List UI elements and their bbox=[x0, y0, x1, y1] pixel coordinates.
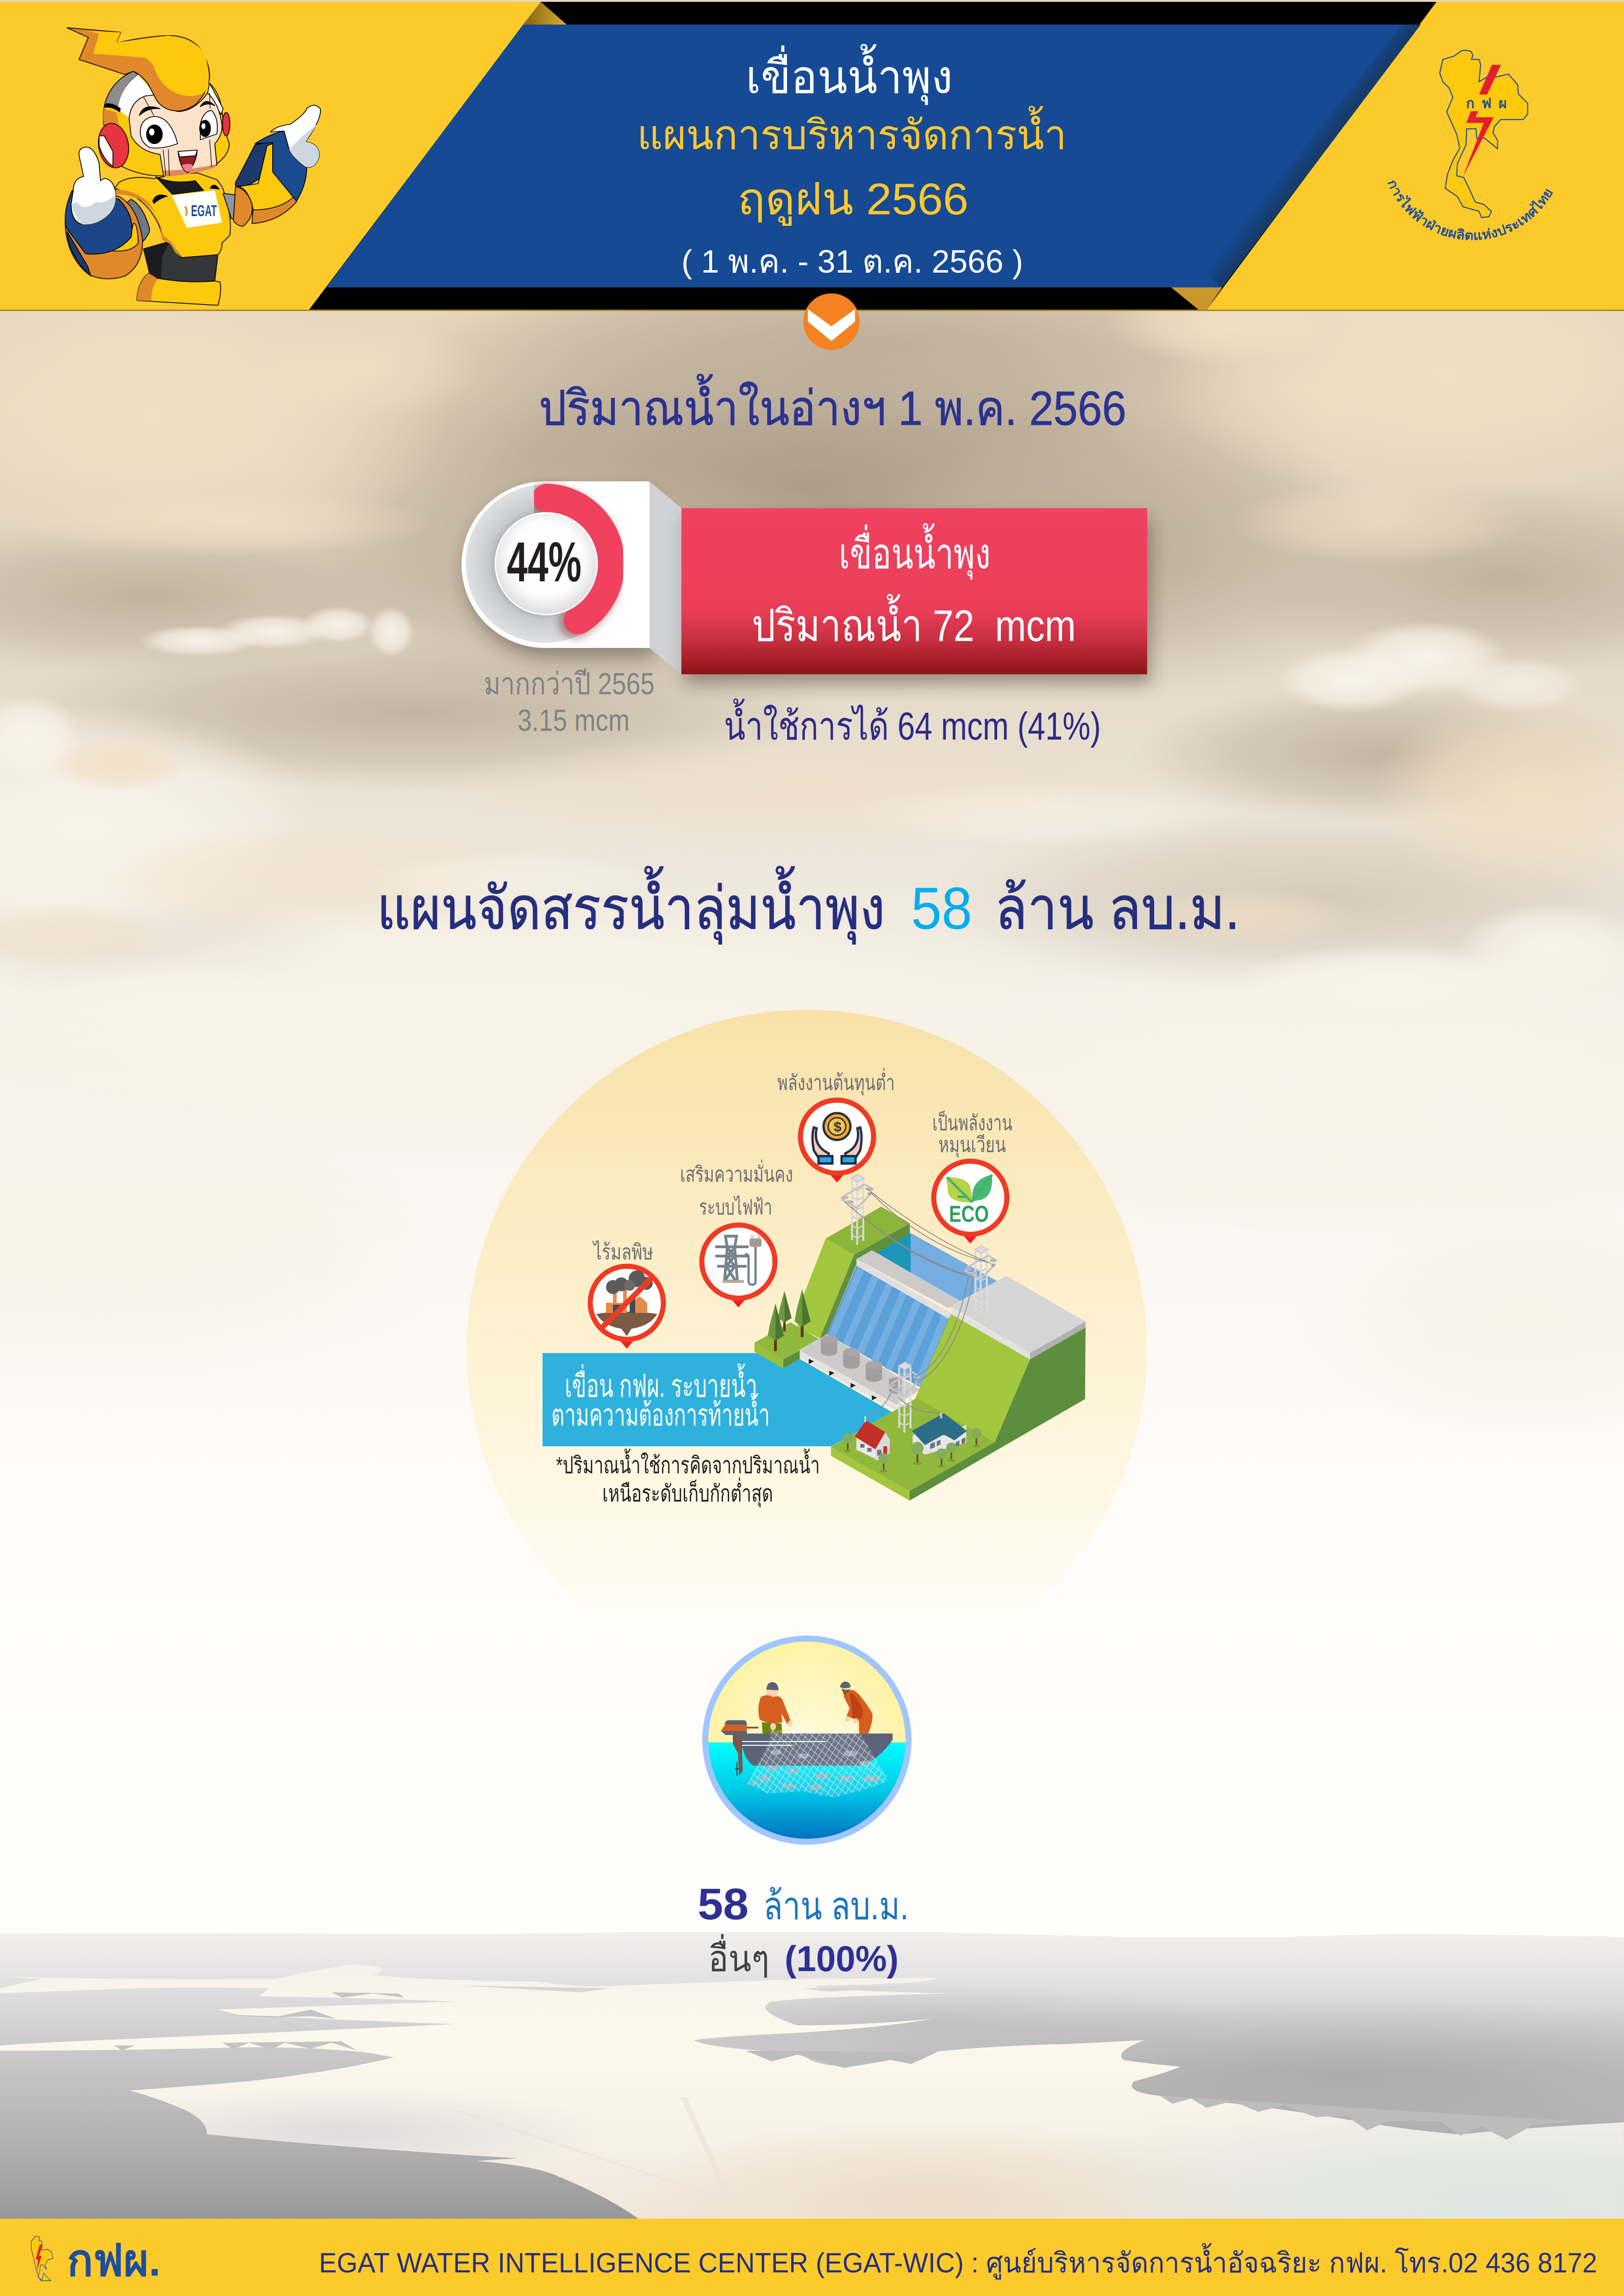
comparison note: 3.15 mcm bbox=[518, 703, 630, 737]
dam illustration bbox=[543, 1175, 1086, 1500]
release label text: ตามความต้องการท้ายน้ำ bbox=[551, 1393, 770, 1432]
header black backing bbox=[278, 2, 1481, 310]
benefit: grid stability bbox=[680, 1159, 793, 1307]
header title: เขื่อนน้ำพุง bbox=[746, 44, 953, 106]
village trees bbox=[843, 1428, 981, 1473]
far hills and land bbox=[0, 1932, 1624, 2221]
footer logo text: กฟผ. bbox=[67, 2236, 161, 2285]
section heading: allocation plan: ล้าน ลบ.ม. bbox=[995, 876, 1240, 942]
mascot face bbox=[129, 93, 222, 177]
gauge value: 44% bbox=[507, 530, 581, 593]
left hill bbox=[797, 1207, 910, 1338]
benefit: renewable: เป็นพลังงาน bbox=[932, 1110, 1012, 1135]
pin: money hands bbox=[800, 1100, 874, 1182]
power lines bbox=[844, 1188, 991, 1417]
mascot bbox=[65, 28, 320, 305]
section heading: allocation plan bbox=[377, 866, 1240, 945]
allocation use: อื่นๆ bbox=[708, 1934, 769, 1979]
pine trees bbox=[768, 1289, 811, 1351]
logo initials: กฟผ bbox=[1466, 95, 1507, 111]
islets and shore reflections bbox=[461, 1985, 937, 1992]
transmission towers bbox=[841, 1175, 997, 1432]
pin: money hands: $ bbox=[834, 1120, 842, 1135]
mascot hair bolt bbox=[67, 28, 210, 111]
boat hull bbox=[742, 1734, 893, 1766]
gauge panel bbox=[462, 481, 681, 674]
mascot ear bbox=[95, 112, 230, 170]
section heading: reservoir volume: ปริมาณน้ำในอ่างฯ 1 พ.ค. 2566 bbox=[539, 374, 1126, 436]
gauge centre bbox=[495, 513, 597, 615]
benefit: no pollution bbox=[590, 1240, 663, 1349]
benefit: low cost bbox=[777, 1068, 895, 1182]
hydropower panel bbox=[467, 1010, 1147, 1690]
fisherman left bbox=[758, 1682, 793, 1735]
card volume: ปริมาณน้ำ 72 mcm bbox=[752, 594, 1076, 651]
section heading: allocation plan: 58 bbox=[911, 876, 972, 942]
mascot mouth bbox=[178, 150, 197, 173]
blue roof house bbox=[912, 1413, 967, 1455]
benefit: renewable bbox=[932, 1110, 1012, 1244]
footnote bbox=[556, 1449, 820, 1507]
pin: ECO leaves bbox=[934, 1161, 1007, 1244]
mascot torso bbox=[114, 173, 231, 305]
pin: pylon and plug bbox=[702, 1225, 775, 1307]
date range: ( 1 พ.ค. - 31 ต.ค. 2566 ) bbox=[681, 243, 1023, 280]
header subtitle: แผนการบริหารจัดการน้ำ bbox=[637, 106, 1067, 158]
footer small map logo bbox=[31, 2236, 53, 2281]
blue panel edge shade bbox=[1204, 25, 1421, 287]
fisherman right bbox=[840, 1681, 873, 1734]
gold fold bottom bbox=[1171, 287, 1222, 310]
fishermen and boat bbox=[721, 1681, 893, 1798]
mascot eyes bbox=[139, 101, 217, 148]
comparison note bbox=[484, 666, 655, 737]
benefit: no pollution: ไร้มลพิษ bbox=[592, 1240, 653, 1264]
mascot right arm bbox=[223, 105, 320, 226]
mascot badge bbox=[172, 190, 222, 228]
footer bar bbox=[0, 2219, 1624, 2296]
red dam card bbox=[681, 508, 1147, 674]
spillway bbox=[827, 1266, 949, 1387]
sea bbox=[708, 1742, 906, 1839]
lake photo bbox=[0, 1932, 1624, 2219]
mascot helmet bbox=[103, 71, 229, 176]
header bottom edge line bbox=[0, 310, 1624, 311]
cloud puffs bbox=[0, 319, 1624, 1046]
tree island bbox=[755, 1322, 818, 1369]
benefit: grid stability: เสริมความมั่นคง bbox=[680, 1159, 793, 1186]
footer contact text: EGAT WATER INTELLIGENCE CENTER (EGAT-WIC) : ศูนย์บริหารจัดการน้ำอัจฉริยะ กฟผ. โทร.02 436 8172 bbox=[319, 2243, 1597, 2280]
red lightning bolt bbox=[1463, 65, 1501, 177]
water bbox=[543, 1353, 892, 1446]
release label text: เขื่อน กฟผ. ระบายน้ำ bbox=[565, 1363, 757, 1404]
reservoir bbox=[876, 1233, 997, 1301]
pin: factory crossed out bbox=[590, 1266, 663, 1349]
benefit: low cost: พลังงานต้นทุนต่ำ bbox=[777, 1068, 895, 1096]
outboard motor bbox=[721, 1720, 758, 1776]
pale yellow circle bbox=[467, 1010, 1147, 1690]
allocation value: 58 bbox=[698, 1879, 749, 1929]
comparison note: มากกว่าปี 2565 bbox=[484, 666, 655, 701]
crest bbox=[856, 1251, 960, 1319]
allocation use: (100%) bbox=[785, 1938, 899, 1979]
benefit: grid stability: ระบบไฟฟ้า bbox=[699, 1195, 772, 1219]
section heading: allocation plan: แผนจัดสรรน้ำลุ่มน้ำพุง bbox=[377, 866, 885, 945]
right bank bbox=[916, 1276, 1086, 1443]
fish bbox=[747, 1750, 880, 1790]
boat stripes bbox=[742, 1742, 826, 1745]
lake water bbox=[0, 1964, 1624, 2219]
gauge disc bbox=[466, 485, 624, 643]
release label text bbox=[551, 1363, 770, 1432]
pin: ECO leaves: ECO bbox=[949, 1201, 989, 1227]
gauge base with white tab bbox=[462, 481, 650, 648]
header left yellow panel bbox=[0, 2, 541, 310]
season: ฤดูฝน 2566 bbox=[737, 174, 968, 226]
map of Thailand bbox=[1440, 50, 1528, 218]
usable water: น้ำใช้การได้ 64 mcm (41%) bbox=[724, 698, 1101, 748]
logo: EGAT Thailand map bbox=[1384, 50, 1556, 243]
header band bbox=[0, 2, 1624, 311]
fishing net bbox=[747, 1720, 889, 1798]
gold fold top bbox=[523, 2, 567, 25]
gauge arc 44 percent bbox=[547, 498, 610, 620]
village island bbox=[831, 1398, 1085, 1500]
footnote: *ปริมาณน้ำใช้การคิดจากปริมาณน้ำ bbox=[556, 1449, 820, 1478]
connector side bbox=[650, 481, 681, 674]
arrow badge bbox=[803, 293, 860, 350]
footnote: เหนือระดับเก็บกักต่ำสุด bbox=[602, 1478, 773, 1507]
mascot left arm bbox=[65, 147, 150, 279]
fishing circle icon bbox=[694, 1634, 917, 1849]
allocation value: ล้าน ลบ.ม. bbox=[763, 1884, 909, 1928]
header right yellow panel bbox=[1206, 2, 1624, 310]
header blue panel bbox=[326, 25, 1421, 287]
apron with cylinders bbox=[800, 1334, 920, 1412]
benefit: renewable: หมุนเวียน bbox=[938, 1132, 1006, 1158]
mascot badge: EGAT bbox=[191, 202, 217, 220]
allocation use bbox=[708, 1934, 899, 1979]
card dam name: เขื่อนน้ำพุง bbox=[839, 523, 991, 580]
allocation value bbox=[698, 1879, 909, 1929]
red roof house bbox=[855, 1416, 890, 1461]
logo curved name: การไฟฟ้าฝ่ายผลิตแห่งประเทศไทย bbox=[1384, 177, 1556, 243]
sky bbox=[708, 1642, 906, 1743]
